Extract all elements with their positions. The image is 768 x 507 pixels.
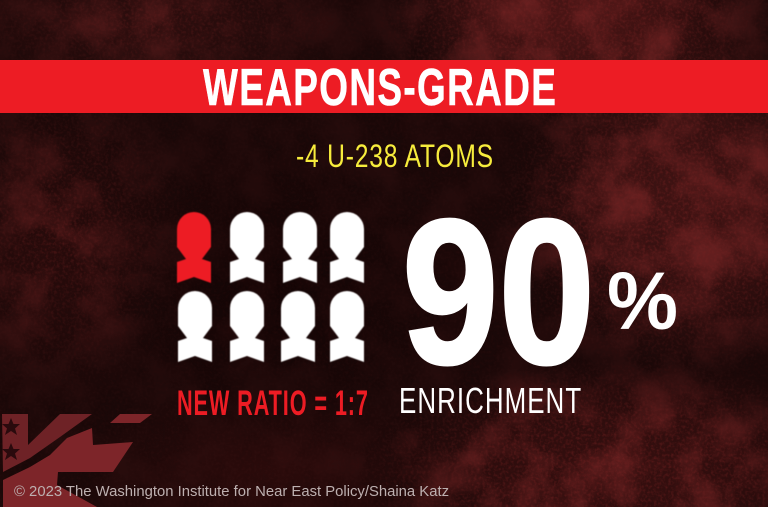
logo watermark [2, 414, 152, 507]
icon: white atom 4 [330, 212, 364, 283]
big number: 90 [402, 177, 595, 407]
copyright credit: © 2023 The Washington Institute for Near East Policy/Shaina Katz [14, 484, 449, 500]
icon: white atom 3 [283, 212, 317, 283]
title: WEAPONS-GRADE [203, 58, 556, 117]
logo: upper right wing [110, 414, 152, 423]
title banner [0, 58, 768, 117]
percent sign: % [607, 256, 678, 347]
icon grid: eight atoms [177, 212, 364, 362]
subtitle: atoms removed: -4 U-238 ATOMS [296, 139, 493, 175]
icon: white atom 5 [178, 291, 212, 362]
ratio label: NEW RATIO = 1:7 [177, 385, 368, 423]
icon: white atom 6 [230, 291, 264, 362]
icon: red U-235 atom [177, 212, 211, 283]
icon: white atom 2 [230, 212, 264, 283]
icon: white atom 8 [330, 291, 364, 362]
logo: flag and upper arm [2, 414, 92, 472]
enrichment label: ENRICHMENT [399, 381, 581, 421]
logo: lower body [3, 428, 133, 507]
icon: white atom 7 [281, 291, 315, 362]
icon: logo stars [2, 418, 20, 460]
